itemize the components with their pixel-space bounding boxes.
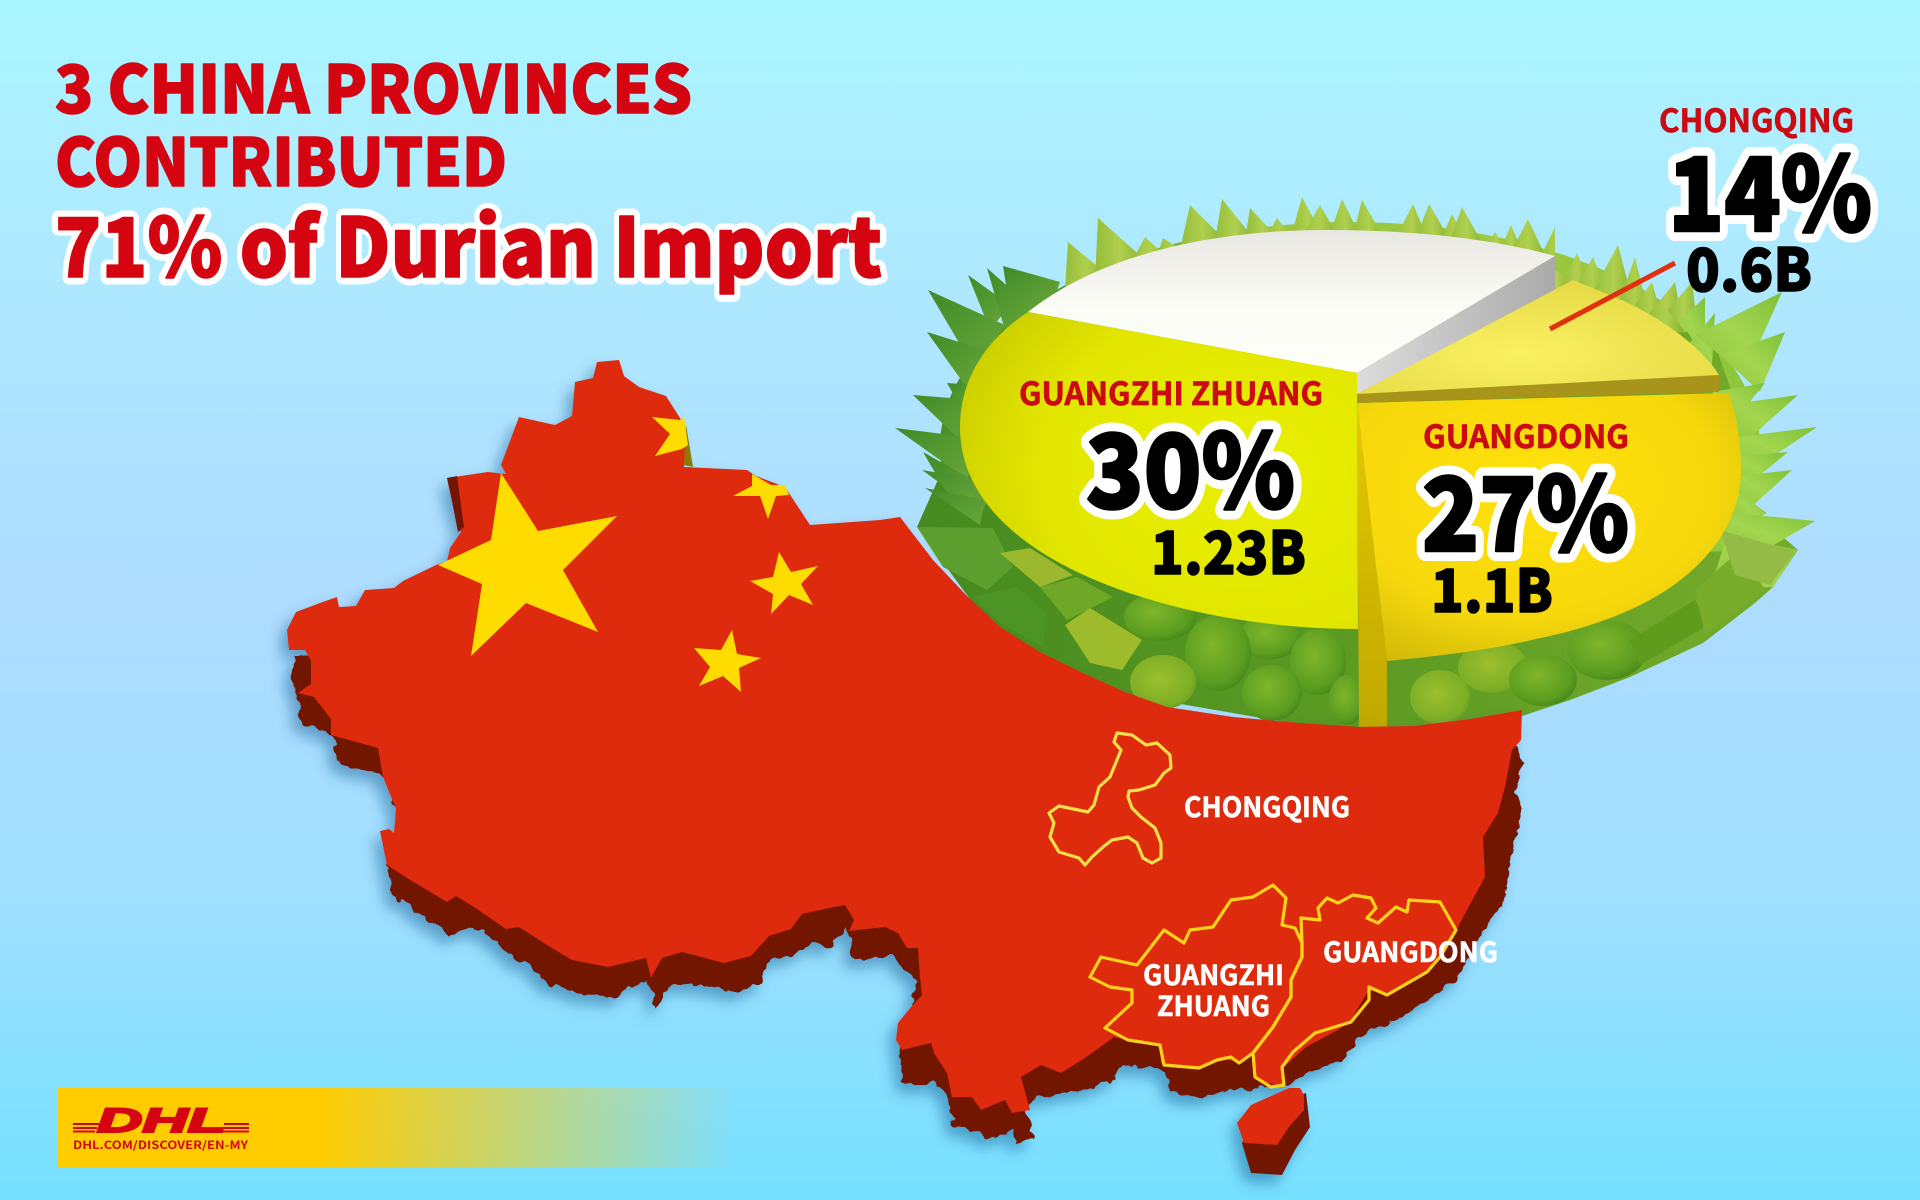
pie slice: remaining share (white): [1028, 230, 1555, 394]
map side sliver north-west: [447, 476, 464, 532]
banner URL: DHL.COM/DISCOVER/EN-MY: [73, 1137, 249, 1153]
data label: Guangdong: 27%: [1422, 434, 1629, 581]
durian pie chart: [895, 197, 1817, 735]
data label: Guangzhi Zhuang: 1.23B: [1151, 506, 1306, 591]
data label: Guangdong: 27%: [1422, 434, 1629, 581]
DHL logo: DHL: [97, 1102, 226, 1140]
map side: Hainan: [1242, 1093, 1310, 1175]
map top: Hainan: [1237, 1088, 1304, 1145]
small star 3: [750, 552, 818, 614]
data label: Chongqing: [1659, 96, 1872, 308]
pie slice: Guangdong: [1357, 393, 1741, 730]
data label: Guangzhi Zhuang: [1019, 369, 1323, 591]
data label: Chongqing: 0.6B: [1686, 223, 1812, 308]
data label: Guangzhi Zhuang: 30%: [1086, 391, 1295, 538]
title: CONTRIBUTED: [55, 110, 507, 206]
data label: Guangdong: [1422, 412, 1629, 629]
map top face: [287, 360, 1522, 1113]
title: 3 CHINA PROVINCES: [55, 37, 692, 133]
data label: Chongqing: 14%: [1668, 114, 1872, 261]
map label: Chongqing: CHONGQING: [1184, 786, 1350, 826]
data label: Chongqing: CHONGQING: [1659, 96, 1854, 142]
data label: Chongqing: 14%: [1668, 114, 1872, 261]
data label: Guangzhi Zhuang: GUANGZHI ZHUANG: [1019, 369, 1323, 415]
husk flesh facets and knobs: [917, 527, 1795, 725]
province outline: Chongqing: [1049, 733, 1171, 865]
large star: [438, 473, 617, 656]
China map: [287, 360, 1523, 1175]
husk body: [917, 330, 1798, 735]
DHL banner: [58, 1088, 738, 1167]
data label: Guangzhi Zhuang: 30%: [1086, 391, 1295, 538]
small star 4: [694, 630, 761, 692]
data label: Guangdong: GUANGDONG: [1423, 412, 1629, 458]
husk rim behind pie: [940, 222, 1760, 672]
map extruded side: [293, 655, 1523, 1142]
title: 71% of Durian Import: [55, 182, 882, 301]
data label: Guangdong: 1.1B: [1431, 544, 1553, 629]
map label: Guangzhi Zhuang: ZHUANG: [1157, 985, 1270, 1025]
small star 1: [652, 417, 693, 467]
map label: Guangdong: GUANGDONG: [1323, 931, 1498, 971]
small star 2: [733, 474, 789, 519]
province outline: Guangdong: [1253, 895, 1456, 1087]
pie slice: Guangzhi Zhuang: [960, 312, 1358, 629]
flag stars: [438, 417, 818, 692]
title: [55, 37, 882, 301]
pie slice: Chongqing: [1357, 280, 1719, 403]
map label: Guangzhi Zhuang: GUANGZHI: [1143, 954, 1284, 994]
leader line: [1550, 263, 1675, 329]
title: 71% of Durian Import: [55, 182, 882, 301]
map label: Guangzhi Zhuang: [1143, 954, 1284, 1025]
province outline: Guangzhi Zhuang: [1090, 885, 1302, 1068]
durian husk with spikes: [895, 197, 1817, 735]
